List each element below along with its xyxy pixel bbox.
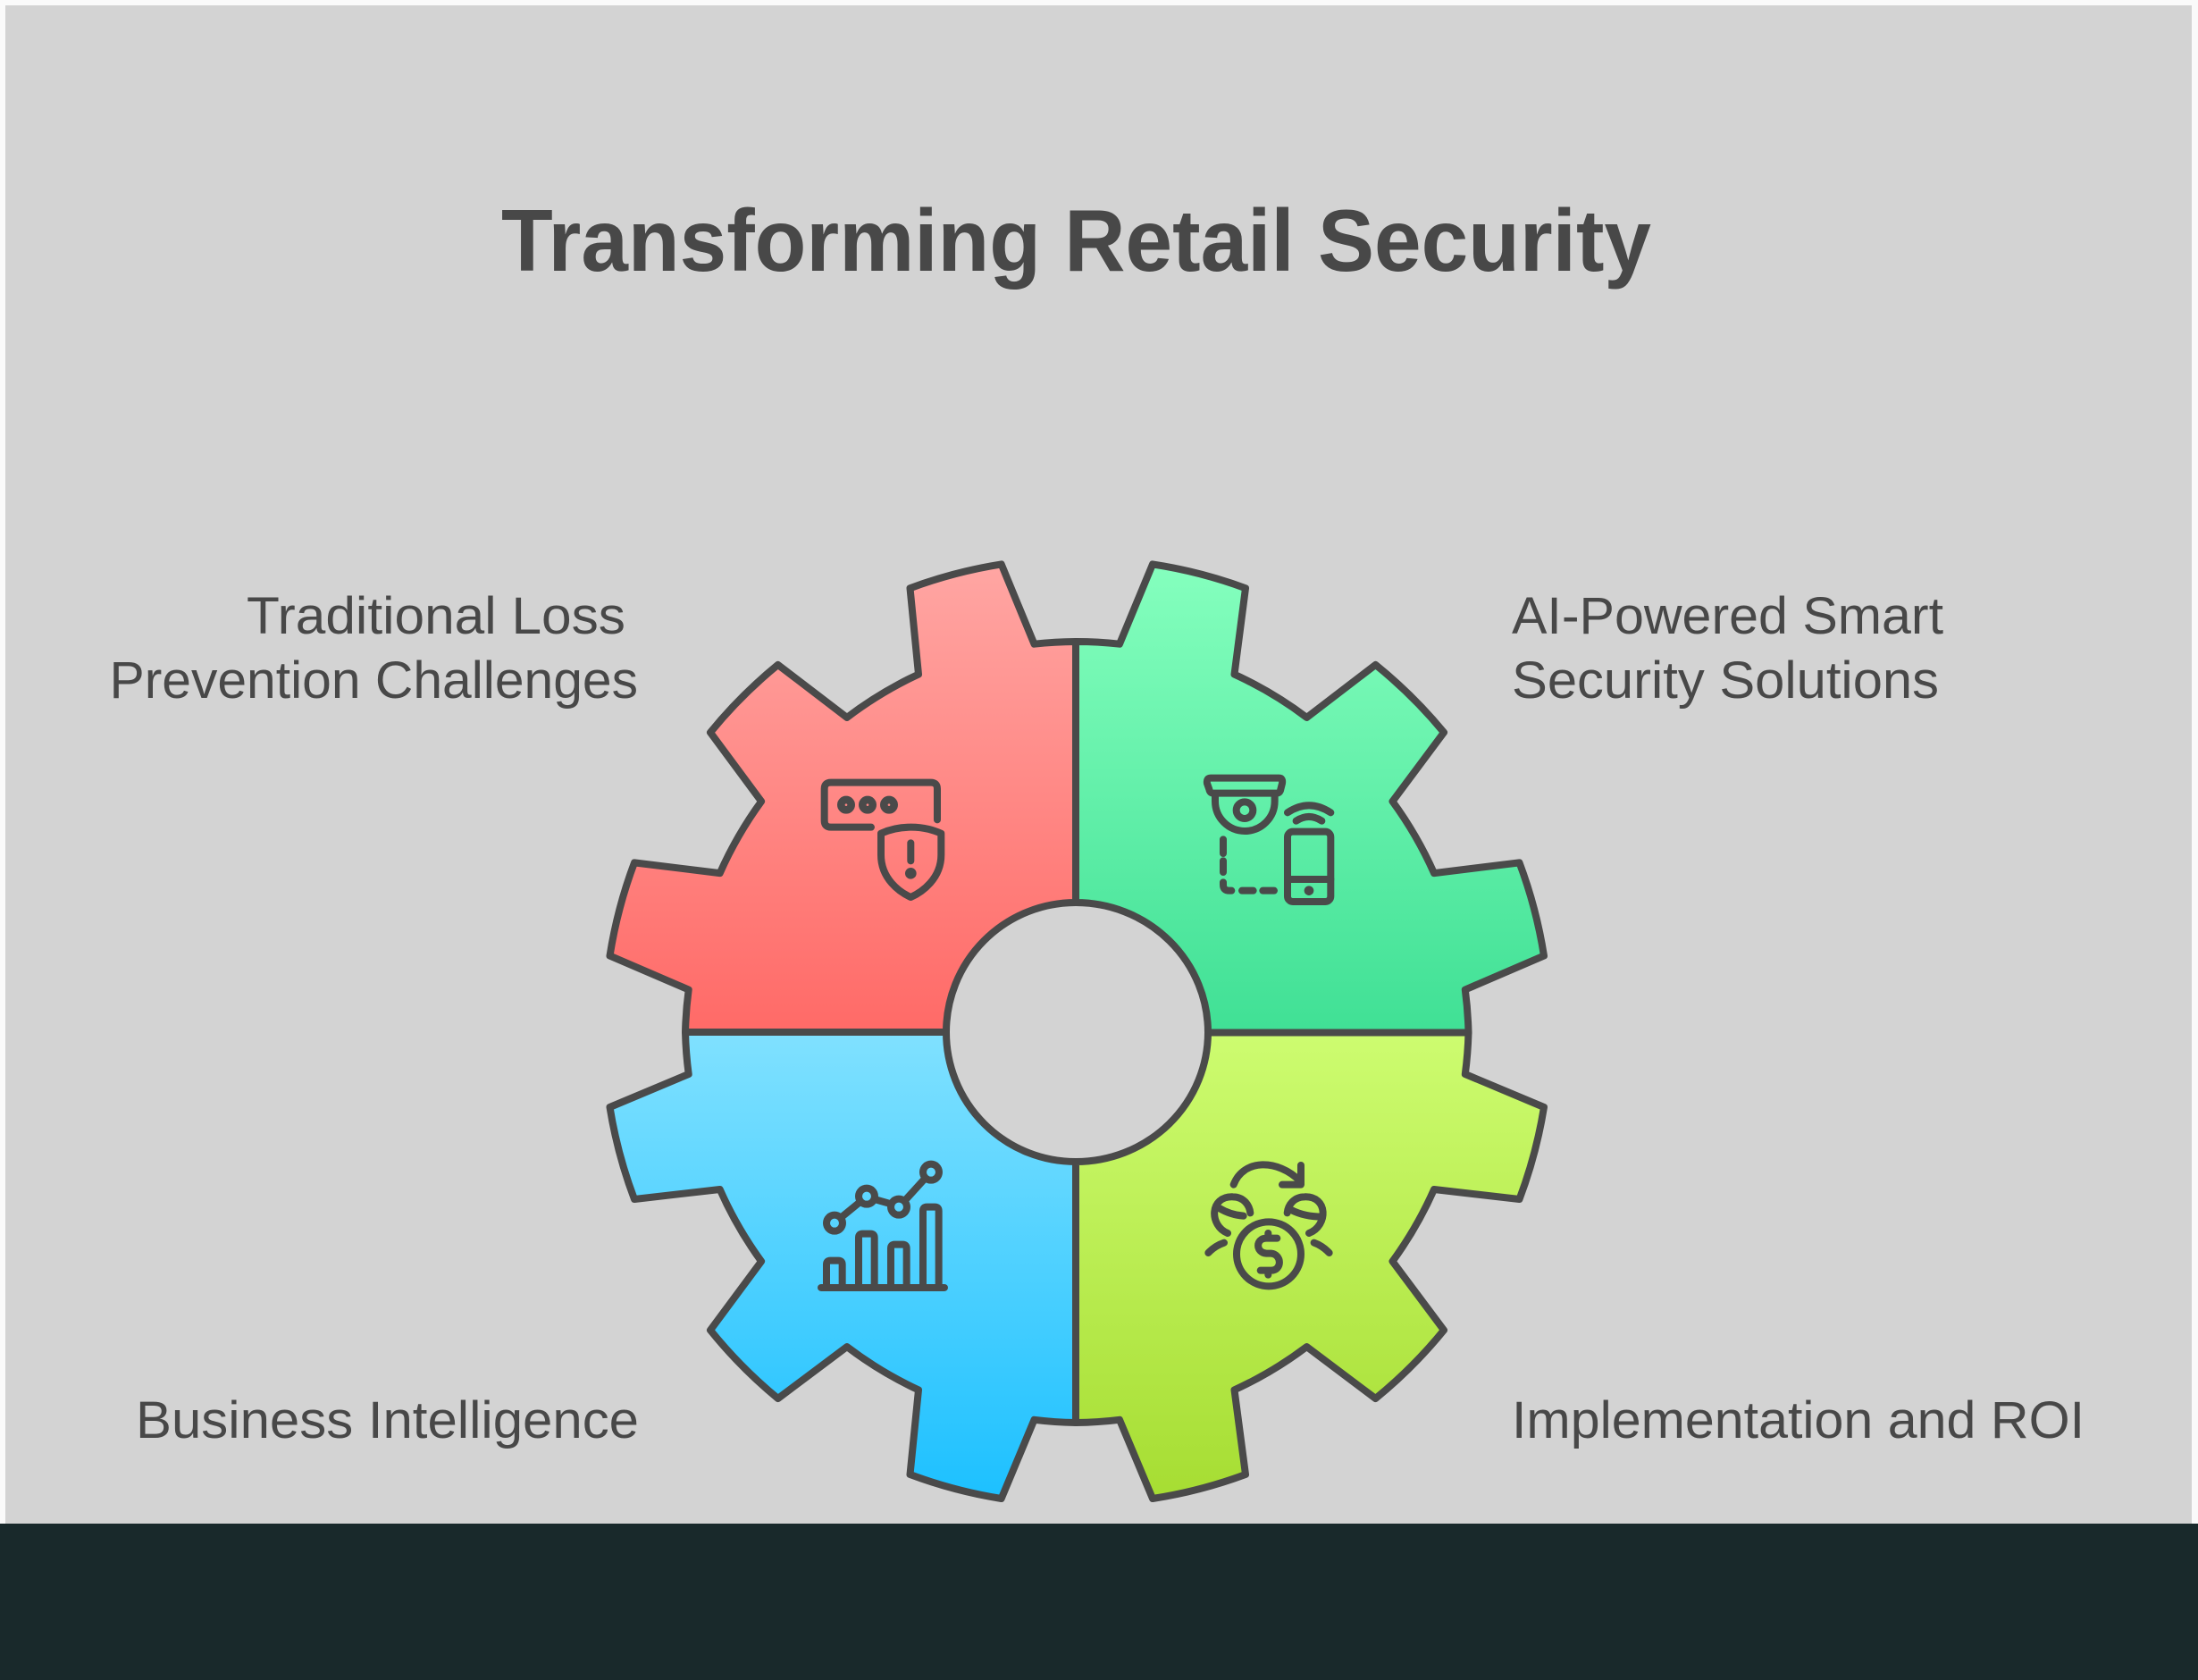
icon: bar chart with trend line bbox=[821, 1164, 944, 1288]
label: implementation and ROI: Implementation and ROI bbox=[1512, 1391, 2085, 1449]
icon: password box with alert shield bbox=[825, 783, 941, 897]
gear segment: lime, bottom right bbox=[1076, 1033, 1544, 1499]
gear segment: blue, bottom left bbox=[609, 1032, 1076, 1499]
footer bar bbox=[0, 1524, 2198, 1680]
label: traditional loss prevention challenges: Traditional Loss bbox=[247, 587, 625, 645]
label: traditional loss prevention challenges: Prevention Challenges bbox=[109, 651, 638, 710]
icon: coin with return arrow bbox=[1208, 1164, 1330, 1286]
label: traditional loss prevention challenges bbox=[109, 587, 638, 710]
label: business intelligence: Business Intelligence bbox=[136, 1391, 639, 1449]
label: AI-powered smart security solutions: AI-Powered Smart bbox=[1512, 587, 1943, 645]
gear segment: red, top left bbox=[609, 564, 1076, 1032]
gear diagram bbox=[609, 564, 1544, 1499]
gear segment: green, top right bbox=[1076, 564, 1544, 1033]
label: AI-powered smart security solutions bbox=[1512, 587, 1943, 710]
label: AI-powered smart security solutions: Security Solutions bbox=[1512, 651, 1939, 710]
title: Transforming Retail Security bbox=[501, 191, 1651, 290]
icon: security camera linked to phone bbox=[1207, 778, 1330, 902]
